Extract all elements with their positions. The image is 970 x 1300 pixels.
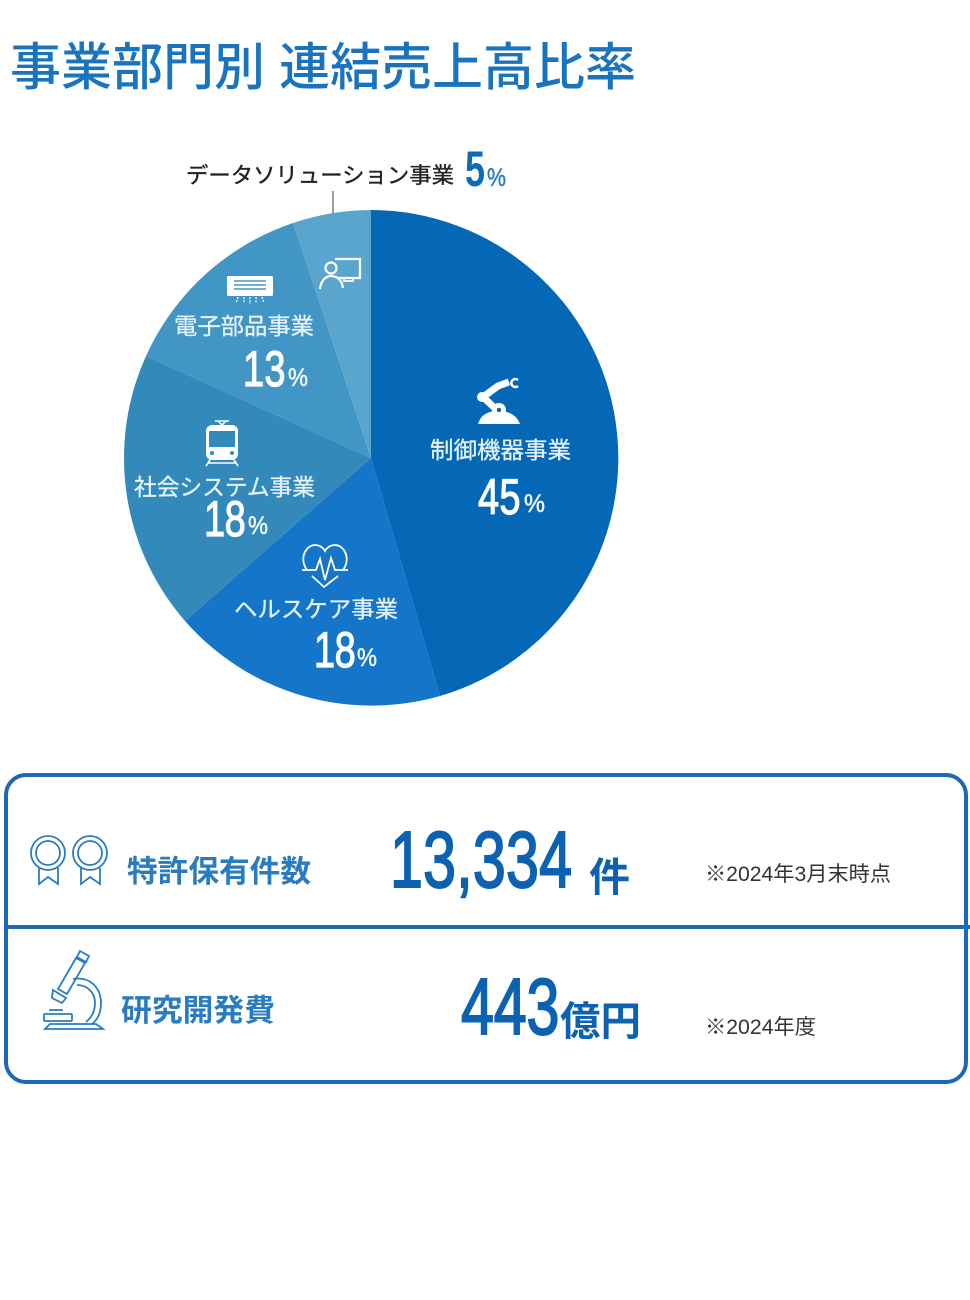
label: 社会システム事業 18%: 社会システム事業 [134,474,315,500]
note: patent date: ※2024年3月末時点 [705,863,891,886]
icon: air conditioner [227,276,273,304]
icon: microscope [44,951,103,1029]
label: 社会システム事業 18%: 18 [204,492,246,547]
label: 電子部品事業 13%: 電子部品事業 [174,313,314,339]
label: 社会システム事業 18%: % [248,512,268,540]
label: ヘルスケア事業 18%: 18 [314,623,356,678]
leader line [332,191,334,214]
label: データソリューション事業 5%: 5 [465,141,485,197]
label: データソリューション事業 5%: % [487,164,506,192]
row divider [6,925,970,929]
value: 13,334 件: 件 [589,856,630,900]
label: 社会システム事業 18% [134,474,315,547]
icon: medals [31,836,107,884]
title: 事業部門別 連結売上高比率 [10,39,636,96]
label: データソリューション事業 5% [186,141,506,197]
label: 特許保有件数: 特許保有件数 [127,855,311,889]
pie chart [124,210,618,706]
slice: 社会システム事業 [124,356,371,621]
note: fiscal year: ※2024年度 [705,1016,816,1039]
slice: データソリューション事業 [293,210,371,458]
icon: robot arm [477,379,520,424]
icon: heart with pulse [302,545,348,587]
slice: ヘルスケア事業 [185,458,440,706]
label: 制御機器事業 45%: 制御機器事業 [430,437,571,463]
label: 制御機器事業 45%: % [524,490,545,518]
value: 443 億円 [461,961,641,1051]
icon: person and monitor [320,259,360,289]
label: 制御機器事業 45% [430,437,571,525]
value: 13,334 件: 13,334 [390,814,572,904]
panel border [6,775,966,1082]
label: 電子部品事業 13% [174,313,314,397]
label: ヘルスケア事業 18%: % [357,644,377,672]
value: 443 億円: 億円 [560,1000,641,1044]
slice: 制御機器事業 [371,210,618,696]
label: ヘルスケア事業 18% [234,596,398,678]
icon: train [206,421,238,466]
label: 制御機器事業 45%: 45 [478,470,521,525]
panel: key figures [6,775,970,1082]
label: 電子部品事業 13%: % [288,364,308,392]
value: 443 億円: 443 [461,961,559,1051]
label: 研究開発費: 研究開発費 [121,994,275,1028]
slice: 電子部品事業 [146,223,371,458]
label: 電子部品事業 13%: 13 [243,342,286,397]
label: データソリューション事業 5%: データソリューション事業 [186,163,454,188]
label: ヘルスケア事業 18%: ヘルスケア事業 [234,596,398,622]
